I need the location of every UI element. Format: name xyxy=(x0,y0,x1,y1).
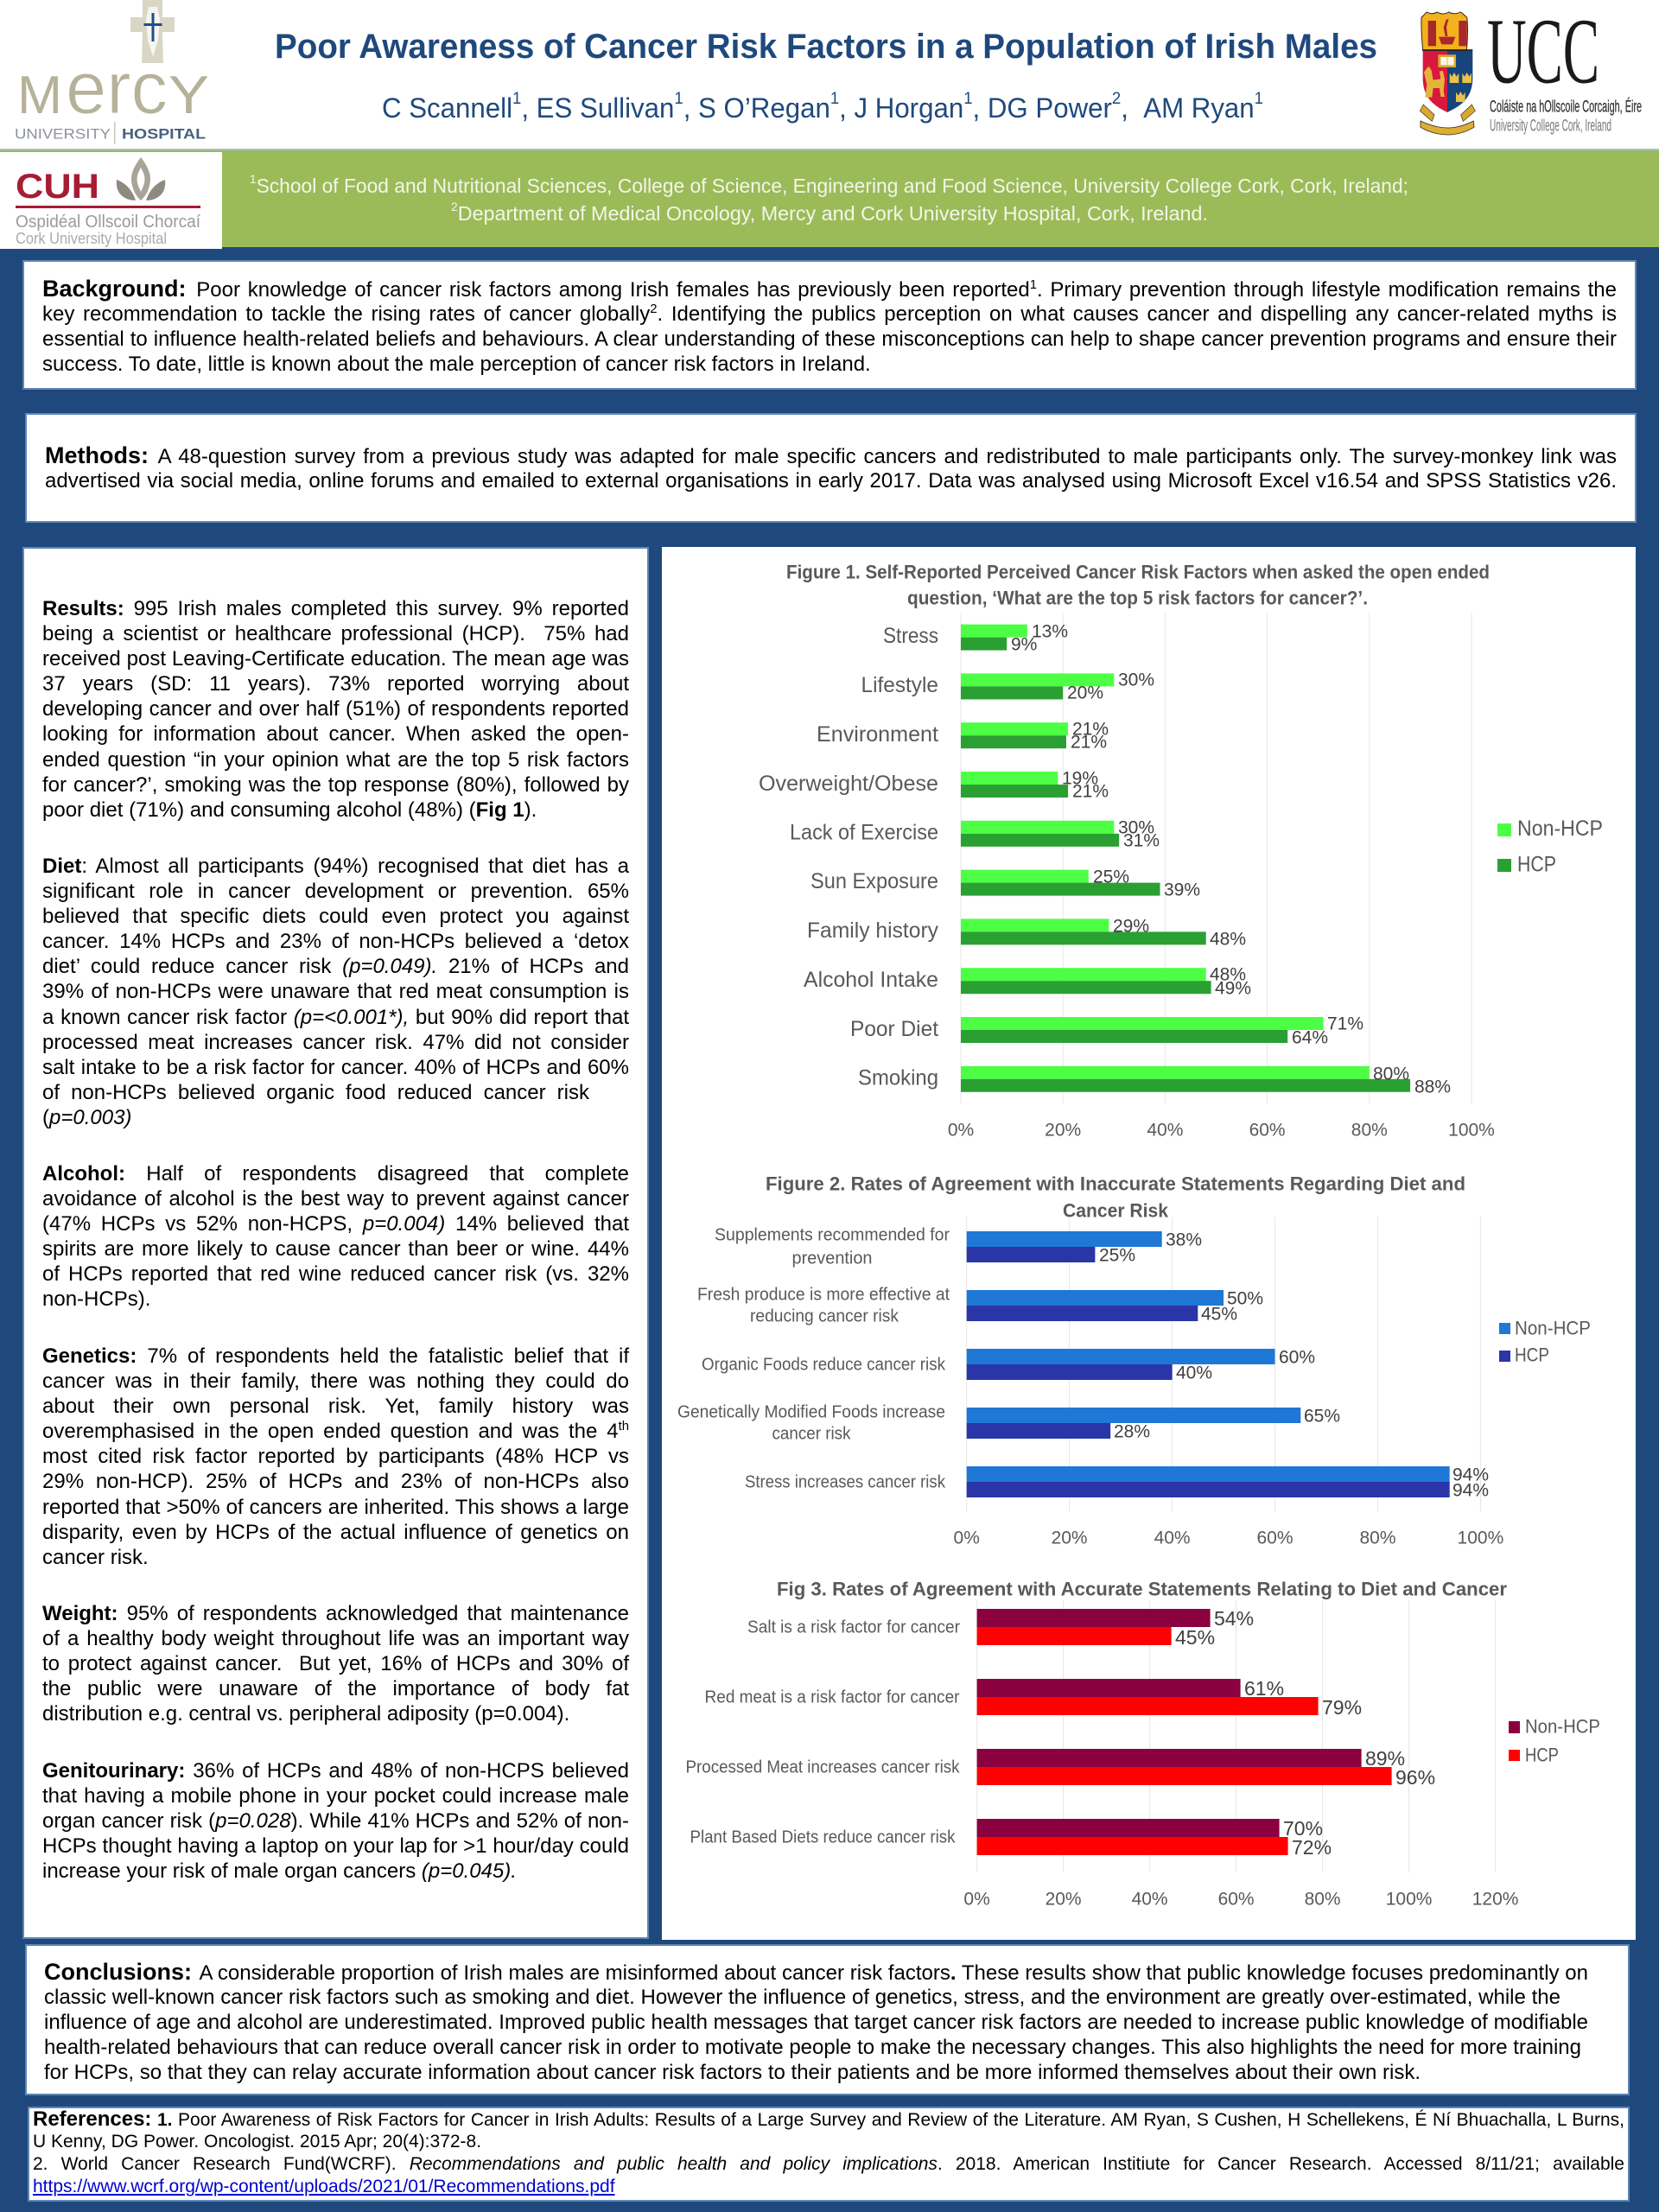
authors: 1 xyxy=(674,90,683,107)
wordmark: University: UNIVERSITY xyxy=(15,126,111,142)
diet paragraph: Diet: Almost all participants (94%) recognised that diet has a xyxy=(42,855,629,878)
row: Red meat: Red meat is a risk factor for cancer xyxy=(705,1687,960,1707)
authors: C Scannell xyxy=(382,92,516,124)
figure 1 x axis: 60% xyxy=(1249,1120,1286,1141)
icon: cross xyxy=(130,0,175,63)
diet paragraph: believed that specific diets could even protect you against xyxy=(42,905,629,928)
references text: References: 1. Poor Awareness of Risk Factors for Cancer in Irish Adults: Results of a Large Survey and Review of the Literature. AM Ryan, S Cushen, H Schellekens, É Ní Bhuachalla, L Burns, xyxy=(33,2107,1624,2131)
row: Genetically Modified Foods: Genetically Modified Foods increase xyxy=(677,1402,945,1422)
row: Processed Meat xyxy=(686,1747,1435,1789)
figure 2 legend: HCP xyxy=(1515,1344,1549,1365)
conclusions text: influence of age and alcohol are underestimated. Improved public health messages that target cancer risk factors are needed to increase public knowledge of modifiable xyxy=(44,2011,1588,2034)
references text: https://www.wcrf.org/wp-content/uploads/2021/01/Recommendations.pdf xyxy=(33,2177,615,2196)
authors: 1 xyxy=(512,90,521,107)
logo: Mercy University Hospital xyxy=(15,0,209,144)
row: Overweight/Obese xyxy=(759,769,1109,802)
row: Processed Meat: 96% xyxy=(1395,1766,1435,1789)
genetics paragraph: reported that >50% of cancers are inherited. This shows a large xyxy=(42,1496,629,1519)
results paragraph xyxy=(42,597,629,822)
weight paragraph xyxy=(42,1602,629,1726)
row: Lifestyle xyxy=(861,671,1154,703)
figure 2 x axis: 20% xyxy=(1052,1528,1088,1548)
background text xyxy=(42,276,1617,376)
authors: , ES Sullivan xyxy=(521,92,674,124)
references text: 2. World Cancer Research Fund(WCRF). Recommendations and public health and policy implications. 2018. American Institiute for Cancer Research. Accessed 8/11/21; available xyxy=(33,2154,1624,2174)
row: Supplements: 25% xyxy=(1099,1246,1135,1265)
row: Poor Diet xyxy=(850,1014,1363,1047)
chart: figure 2 xyxy=(677,1173,1591,1548)
panel: methods xyxy=(25,413,1637,523)
diet paragraph: a known cancer risk factor (p=<0.001*), but 90% did report that xyxy=(42,1006,629,1029)
figure 1 x axis: 0% xyxy=(948,1120,974,1141)
wordmark: Mercy xyxy=(17,48,209,130)
row: Fresh produce: 50% xyxy=(1227,1289,1263,1308)
background text: Background: Poor knowledge of cancer risk factors among Irish females has previously been reported1. Primary prevention through lifestyle modification remains the xyxy=(42,276,1617,302)
diet paragraph: processed meat increases cancer risk. 47% did not consider xyxy=(42,1031,629,1054)
row: Smoking: Smoking xyxy=(858,1066,938,1090)
methods text xyxy=(45,442,1617,493)
wordmark: Mercy: M xyxy=(17,66,62,125)
genitourinary paragraph xyxy=(42,1759,629,1883)
diet paragraph xyxy=(42,855,629,1129)
genetics paragraph: Genetics: 7% of respondents held the fatalistic belief that if xyxy=(42,1344,629,1368)
authors: 1 xyxy=(830,90,839,107)
results paragraph: being a scientist or healthcare professional (HCP). 75% had xyxy=(42,622,629,645)
row: Stress: 9% xyxy=(1011,634,1037,655)
affiliation line 1: School of Food and Nutritional Sciences, College of Science, Engineering and Food Science, University College Cork, Cork, Ireland; xyxy=(257,175,1408,197)
figure 2 legend: Non-HCP xyxy=(1515,1317,1591,1339)
diet paragraph: significant role in cancer development or prevention. 65% xyxy=(42,880,629,903)
authors: , S O’Regan xyxy=(683,92,830,124)
results paragraph: looking for information about cancer. When asked the open- xyxy=(42,722,629,746)
wordmark: Mercy: Y xyxy=(168,66,209,125)
row: Salt: 45% xyxy=(1175,1626,1215,1649)
panel: results xyxy=(22,547,649,1939)
row: Red meat: 79% xyxy=(1322,1696,1362,1719)
results paragraph: ended question “in your opinion what are the top 5 risk factors xyxy=(42,748,629,772)
row: Smoking xyxy=(858,1065,1451,1097)
row: Fresh produce: 45% xyxy=(1201,1305,1237,1324)
weight paragraph: distribution e.g. central vs. peripheral adiposity (p=0.004). xyxy=(42,1702,569,1726)
genetics paragraph: overemphasised in the open ended question and was the 4th xyxy=(42,1420,629,1443)
row: Lifestyle: 30% xyxy=(1118,671,1154,690)
authors: 1 xyxy=(963,90,973,107)
CUH English name: Cork University Hospital xyxy=(16,230,167,247)
background text: key recommendation to tackle the rising rates of cancer globally2. Identifying the publics perception on what causes cancer and dispelling any cancer-related myths is xyxy=(42,302,1617,326)
figure 1 x axis: 80% xyxy=(1351,1120,1388,1141)
authors: 2 xyxy=(1112,90,1121,107)
row: Plant Based Diets xyxy=(690,1817,1332,1859)
row: Stress increases xyxy=(745,1465,1489,1500)
results paragraph: Results: 995 Irish males completed this survey. 9% reported xyxy=(42,597,629,620)
affiliation line 2: Department of Medical Oncology, Mercy and Cork University Hospital, Cork, Ireland. xyxy=(458,202,1208,225)
affiliation line 2: 2 xyxy=(451,200,458,213)
row: Alcohol Intake: Alcohol Intake xyxy=(804,968,938,992)
panel: references xyxy=(28,2107,1630,2202)
row: Stress increases: Stress increases cancer risk xyxy=(745,1472,946,1491)
figure 3 x axis: 40% xyxy=(1132,1889,1168,1910)
conclusions text: for HCPs, so that they can relay accurate information about cancer risk factors to their patients and be more informed themselves about their own risk. xyxy=(44,2061,1421,2084)
figure 1 x axis: 20% xyxy=(1045,1120,1081,1141)
title: Poor Awareness of Cancer Risk Factors in a Population of Irish Males xyxy=(275,28,1377,66)
row: Fresh produce: reducing cancer risk xyxy=(750,1306,899,1325)
diet paragraph: (p=0.003) xyxy=(42,1106,131,1129)
row: Plant Based Diets: 70% xyxy=(1283,1817,1323,1840)
figure 3 title: Fig 3. Rates of Agreement with Accurate Statements Relating to Diet and Cancer xyxy=(777,1578,1507,1600)
genitourinary paragraph: HCPs thought having a laptop on your lap for >1 hour/day could xyxy=(42,1834,629,1858)
figure 3 legend: Non-HCP xyxy=(1525,1716,1600,1737)
figure 3 legend xyxy=(1509,1716,1600,1766)
results paragraph: poor diet (71%) and consuming alcohol (48%) (Fig 1). xyxy=(42,798,537,822)
figure 3 x axis xyxy=(963,1889,1518,1910)
methods text: Methods: A 48-question survey from a previous study was adapted for male specific cancers and redistributed to male participants only. The survey-monkey link was xyxy=(45,442,1617,468)
diet paragraph: 39% of non-HCPs were unaware that red meat consumption is xyxy=(42,980,629,1003)
background text: success. To date, little is known about the male perception of cancer risk factors in Ireland. xyxy=(42,353,871,376)
figure 3 x axis: 100% xyxy=(1386,1889,1432,1910)
row: Environment: 21% xyxy=(1071,733,1107,752)
logo: UCC xyxy=(1420,0,1642,135)
wordmark: Mercy: erc xyxy=(66,48,168,130)
row: Lifestyle: Lifestyle xyxy=(861,673,938,697)
figure 1 x axis xyxy=(948,1120,1495,1141)
authors: 1 xyxy=(1255,90,1263,107)
row: Family history: Family history xyxy=(807,918,938,943)
references text: U Kenny, DG Power. Oncologist. 2015 Apr; 20(4):372-8. xyxy=(33,2132,481,2152)
row: Alcohol Intake xyxy=(804,964,1251,999)
row: Salt: Salt is a risk factor for cancer xyxy=(747,1618,960,1637)
wordmark: Hospital: HOSPITAL xyxy=(122,126,206,142)
row: Poor Diet: Poor Diet xyxy=(850,1017,938,1041)
alcohol paragraph: avoidance of alcohol is the best way to prevent against cancer xyxy=(42,1187,629,1211)
genitourinary paragraph: that having a mobile phone in your pocket could increase male xyxy=(42,1784,629,1808)
row: Lack of Exercise xyxy=(790,817,1160,850)
figure 2 x axis xyxy=(954,1528,1503,1548)
genetics paragraph: 29% non-HCP). 25% of HCPs and 23% of non-HCPs also xyxy=(42,1470,629,1493)
panel: conclusions xyxy=(25,1944,1630,2095)
row: Sun Exposure: 39% xyxy=(1164,880,1200,900)
genetics paragraph: cancer was in their family, there was nothing they could do xyxy=(42,1370,629,1393)
row: Overweight/Obese: Overweight/Obese xyxy=(759,772,938,796)
figure 1 legend: Non-HCP xyxy=(1517,817,1603,841)
row: Environment xyxy=(817,719,1109,752)
figure 2 x axis: 0% xyxy=(954,1528,980,1548)
weight paragraph: to protect against cancer. But yet, 16% of HCPs and 30% of xyxy=(42,1652,629,1675)
genetics paragraph: about their own personal risk. Yet, family history was xyxy=(42,1395,629,1418)
row: Environment: Environment xyxy=(817,722,938,747)
alcohol paragraph: Alcohol: Half of respondents disagreed that complete xyxy=(42,1162,629,1185)
figure 2 title xyxy=(766,1173,1465,1222)
alcohol paragraph: (47% HCPs vs 52% non-HCPS, p=0.004) 14% believed that xyxy=(42,1212,629,1236)
figure 2 x axis: 60% xyxy=(1256,1528,1294,1548)
row: Environment: 21% xyxy=(1072,719,1109,740)
row: Organic Foods: 60% xyxy=(1279,1348,1315,1367)
figure 3 x axis: 0% xyxy=(963,1889,990,1910)
row: Organic Foods xyxy=(702,1348,1315,1382)
figure 1 title: question, ‘What are the top 5 risk factors for cancer?’. xyxy=(907,588,1368,608)
authors: , J Horgan xyxy=(839,92,963,124)
figure 1 x axis: 100% xyxy=(1448,1120,1495,1141)
row: Alcohol Intake: 48% xyxy=(1210,964,1246,985)
row: Lack of Exercise: 31% xyxy=(1123,831,1160,850)
figure 3 x axis: 20% xyxy=(1046,1889,1082,1910)
row: Family history: 29% xyxy=(1113,916,1149,937)
logo: CUH xyxy=(0,152,222,249)
row: Sun Exposure: 25% xyxy=(1093,868,1129,887)
figure 1 x axis: 40% xyxy=(1147,1120,1183,1141)
affiliation line 1: 1 xyxy=(250,172,257,186)
wordmark: CUH: CUH xyxy=(16,168,99,206)
results paragraph: developing cancer and over half (51%) of respondents reported xyxy=(42,697,629,721)
figure 2 x axis: 100% xyxy=(1458,1528,1503,1548)
row: Overweight/Obese: 21% xyxy=(1072,781,1109,802)
genetics paragraph: disparity, even by HCPs of the actual influence of genetics on xyxy=(42,1521,629,1544)
row: Sun Exposure xyxy=(810,868,1200,900)
genetics paragraph xyxy=(42,1344,629,1569)
authors: , DG Power xyxy=(973,92,1112,124)
row: Fresh produce: Fresh produce is more effective at xyxy=(697,1284,950,1305)
diet paragraph: cancer. 14% HCPs and 23% of non-HCPs believed a ‘detox xyxy=(42,930,629,953)
diet paragraph: of non-HCPs believed organic food reduced cancer risk xyxy=(42,1081,589,1104)
background text: essential to influence health-related beliefs and behaviours. A clear understanding of these misconceptions can help to shape cancer prevention programs and ensure their xyxy=(42,327,1617,351)
row: Smoking: 88% xyxy=(1414,1077,1451,1097)
conclusions text: health-related behaviours that can reduce overall cancer risk in order to motivate people to make the necessary changes. This also highlights the need for more training xyxy=(44,2036,1581,2059)
row: Lack of Exercise: 30% xyxy=(1118,817,1154,838)
authors: , AM Ryan xyxy=(1121,92,1255,124)
references text xyxy=(33,2107,1624,2196)
row: Processed Meat: Processed Meat increases cancer risk xyxy=(686,1758,960,1777)
figure 3 x axis: 80% xyxy=(1305,1889,1341,1910)
row: Overweight/Obese: 19% xyxy=(1062,769,1098,788)
row: Genetically Modified Foods xyxy=(677,1402,1340,1443)
diet paragraph: diet’ could reduce cancer risk (p=0.049). 21% of HCPs and xyxy=(42,955,629,978)
row: Poor Diet: 71% xyxy=(1327,1014,1363,1033)
row: Stress xyxy=(883,622,1068,655)
genitourinary paragraph: Genitourinary: 36% of HCPs and 48% of non-HCPS believed xyxy=(42,1759,629,1783)
row: Supplements: Supplements recommended for xyxy=(715,1225,950,1244)
row: Supplements: 38% xyxy=(1166,1230,1202,1249)
figure 2 x axis: 40% xyxy=(1154,1528,1191,1548)
row: Genetically Modified Foods: 65% xyxy=(1304,1407,1340,1426)
row: Red meat: 61% xyxy=(1244,1677,1284,1700)
header band xyxy=(0,0,1659,249)
row: Processed Meat: 89% xyxy=(1365,1747,1405,1770)
row: Organic Foods: 40% xyxy=(1176,1363,1212,1382)
figure 1 title xyxy=(786,562,1490,608)
row: Genetically Modified Foods: 28% xyxy=(1114,1422,1150,1441)
figure 2 title: Figure 2. Rates of Agreement with Inaccurate Statements Regarding Diet and xyxy=(766,1173,1465,1194)
results paragraph: for cancer?’, smoking was the top response (80%), followed by xyxy=(42,773,629,797)
figure 2 title: Cancer Risk xyxy=(1063,1199,1169,1222)
alcohol paragraph xyxy=(42,1162,629,1311)
figure 3 legend: HCP xyxy=(1525,1744,1559,1766)
CUH Irish name: Ospidéal Ollscoil Chorcaí xyxy=(16,213,200,232)
diet paragraph: salt intake to be a risk factor for cancer. 40% of HCPs and 60% xyxy=(42,1056,629,1079)
row: Plant Based Diets: 72% xyxy=(1292,1836,1332,1859)
genetics paragraph: cancer risk. xyxy=(42,1546,149,1569)
row: Genetically Modified Foods: cancer risk xyxy=(772,1424,851,1443)
panel: charts xyxy=(662,547,1636,1940)
chart: figure 3 xyxy=(686,1578,1600,1910)
figure 2 legend xyxy=(1499,1317,1591,1365)
affiliations band xyxy=(0,150,1659,247)
figure 3 x axis: 120% xyxy=(1472,1889,1518,1910)
row: Stress: Stress xyxy=(883,624,938,648)
figure 1 legend: HCP xyxy=(1517,852,1556,876)
row: Organic Foods: Organic Foods reduce cancer risk xyxy=(702,1355,946,1374)
figure 3 x axis: 60% xyxy=(1218,1889,1255,1910)
figure 2 x axis: 80% xyxy=(1359,1528,1396,1548)
row: Sun Exposure: Sun Exposure xyxy=(810,869,938,893)
icon: lotus xyxy=(117,157,165,200)
weight paragraph: of a healthy body weight throughout life was an important way xyxy=(42,1627,629,1650)
row: Red meat xyxy=(705,1677,1362,1719)
row: Salt: 54% xyxy=(1214,1607,1254,1630)
weight paragraph: Weight: 95% of respondents acknowledged that maintenance xyxy=(42,1602,629,1625)
row: Poor Diet: 64% xyxy=(1292,1028,1328,1047)
row: Stress increases: 94% xyxy=(1452,1481,1489,1500)
icon: UCC crest xyxy=(1420,12,1475,135)
row: Lack of Exercise: Lack of Exercise xyxy=(790,821,938,845)
row: Family history xyxy=(807,916,1246,949)
row: Stress: 13% xyxy=(1032,622,1068,641)
weight paragraph: the public were unaware of the importance of body fat xyxy=(42,1677,629,1700)
row: Lifestyle: 20% xyxy=(1067,683,1103,703)
row: Plant Based Diets: Plant Based Diets reduce cancer risk xyxy=(690,1827,956,1847)
alcohol paragraph: of HCPs reported that red wine reduced cancer risk (vs. 32% xyxy=(42,1262,629,1286)
results paragraph: received post Leaving-Certificate education. The mean age was xyxy=(42,647,629,671)
genitourinary paragraph: organ cancer risk (p=0.028). While 41% HCPs and 52% of non- xyxy=(42,1809,629,1833)
methods text: advertised via social media, online forums and emailed to external organisations in early 2017. Data was analysed using Microsoft Excel v16.54 and SPSS Statistics v26. xyxy=(45,469,1617,493)
conclusions text xyxy=(44,1958,1588,2084)
row: Supplements: prevention xyxy=(791,1248,873,1268)
row: Fresh produce xyxy=(697,1284,1263,1325)
panel: background xyxy=(22,260,1637,390)
row: Stress increases: 94% xyxy=(1452,1465,1489,1484)
genetics paragraph: most cited risk factor reported by participants (48% HCP vs xyxy=(42,1445,629,1468)
row: Supplements xyxy=(715,1225,1202,1268)
alcohol paragraph: non-HCPs). xyxy=(42,1287,150,1311)
chart: figure 1 xyxy=(759,562,1603,1141)
row: Salt xyxy=(747,1607,1254,1649)
genitourinary paragraph: increase your risk of male organ cancers (p=0.045). xyxy=(42,1859,517,1883)
conclusions text: Conclusions: A considerable proportion of Irish males are misinformed about cancer risk factors. These results show that public knowledge focuses predominantly on xyxy=(44,1958,1588,1984)
results paragraph: 37 years (SD: 11 years). 73% reported worrying about xyxy=(42,672,629,696)
row: Alcohol Intake: 49% xyxy=(1215,978,1251,999)
figure 1 legend xyxy=(1497,817,1603,876)
row: Family history: 48% xyxy=(1210,930,1246,949)
conclusions text: classic well-known cancer risk factors such as smoking and diet. However the influence of genetics, stress, and the environment are greatly over-estimated, while the xyxy=(44,1986,1560,2009)
figure 1 title: Figure 1. Self-Reported Perceived Cancer Risk Factors when asked the open ended xyxy=(786,562,1490,582)
row: Smoking: 80% xyxy=(1373,1065,1409,1084)
alcohol paragraph: spirits are more likely to cause cancer than beer or wine. 44% xyxy=(42,1237,629,1261)
